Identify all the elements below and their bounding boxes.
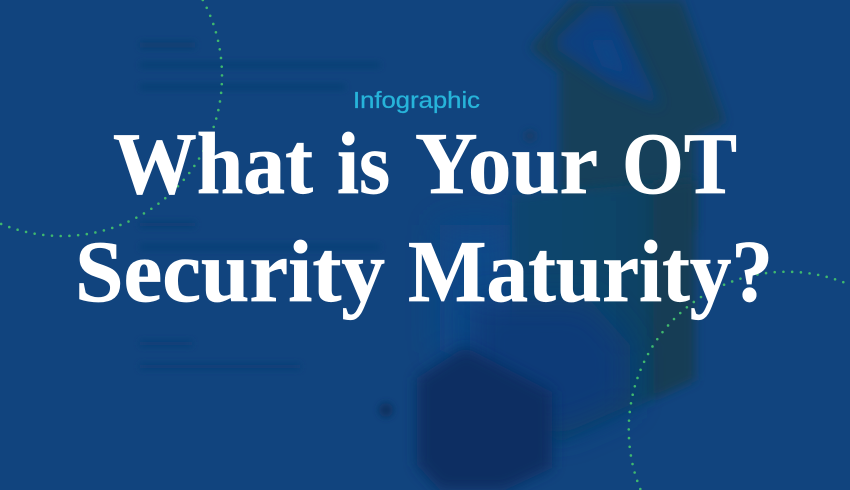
dotted arc: bottom right — [629, 272, 849, 489]
blurred upper tower — [530, 0, 725, 230]
dotted arc: top left — [0, 0, 222, 236]
title line 1: OT — [622, 116, 737, 213]
blurred cloud centre — [590, 40, 626, 74]
title line 1: is — [337, 116, 390, 213]
title line 1: What — [113, 116, 313, 213]
title line 2 — [75, 224, 773, 321]
title line 2: Security — [75, 224, 385, 321]
blurred small dot — [524, 130, 536, 142]
title line 1: Your — [415, 116, 598, 213]
blurred text block top — [140, 42, 380, 89]
blurred node dot — [379, 403, 393, 417]
blurred cloud — [556, 6, 660, 106]
blurred light side panel — [440, 225, 510, 380]
blurred lower tower — [512, 180, 695, 442]
blurred text block middle — [140, 222, 380, 249]
blurred dark cube — [417, 347, 552, 490]
blurred blue front panel — [470, 300, 630, 435]
eyebrow label: Infographic — [353, 87, 480, 113]
blurred background illustration — [140, 0, 725, 490]
blurred text block bottom — [140, 341, 300, 369]
title line 1 — [113, 116, 737, 213]
title — [75, 116, 773, 321]
title line 2: Maturity? — [408, 224, 773, 321]
